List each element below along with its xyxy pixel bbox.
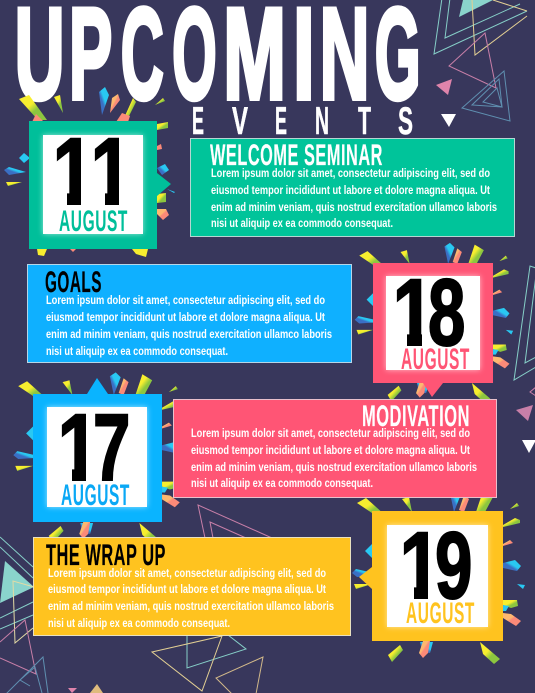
calendar: 19 august — [359, 511, 503, 641]
body text: nisi ut aliquip ex ea commodo consequat. — [46, 346, 228, 358]
body text: eiusmod tempor incididunt ut labore et dolore magna aliqua. Ut — [46, 312, 325, 324]
background triangles: bottom left — [0, 537, 103, 693]
panel: goals — [28, 264, 352, 362]
background triangles: centre — [152, 505, 272, 693]
date number: 1 — [400, 513, 442, 619]
body text — [48, 568, 334, 630]
heading: WELCOME SEMINAR — [210, 139, 383, 172]
date number — [62, 414, 128, 481]
title: events: N — [315, 100, 329, 143]
body text: Lorem ipsum dolor sit amet, consectetur adipiscing elit, sed do — [48, 568, 326, 580]
calendar: 18 august — [373, 260, 493, 397]
heading: GOALS — [45, 266, 102, 299]
heading: THE WRAP UP — [46, 539, 166, 572]
calendar: 11 august — [29, 119, 171, 249]
date number: 1 — [58, 395, 100, 501]
body text — [191, 428, 477, 490]
panel: the wrap up — [34, 538, 350, 636]
date number — [404, 530, 471, 600]
month: AUGUST — [61, 479, 130, 512]
body text: Lorem ipsum dolor sit amet, consectetur adipiscing elit, sed do — [191, 428, 470, 440]
background triangles: right middle — [514, 266, 535, 421]
burst: 19 august — [352, 489, 525, 664]
date number: 1 — [52, 119, 94, 225]
icon: white triangle top right — [441, 114, 456, 127]
burst: 18 august — [355, 243, 513, 403]
body text: enim ad minim veniam, quis nostrud exercitation ullamco laboris — [46, 329, 332, 341]
background triangles: top right — [434, 0, 527, 121]
body text — [46, 295, 332, 358]
body text: nisi ut aliquip ex ea commodo consequat. — [211, 218, 393, 230]
date number — [396, 278, 464, 347]
title: events: T — [358, 100, 371, 143]
panel: modivation — [174, 400, 496, 498]
date number: 1 — [90, 119, 132, 225]
body text: Lorem ipsum dolor sit amet, consectetur adipiscing elit, sed do — [46, 295, 325, 307]
title: events: E — [275, 100, 287, 143]
body text: enim ad minim veniam, quis nostrud exercitation ullamco laboris — [48, 601, 334, 613]
date number — [56, 138, 119, 205]
body text: eiusmod tempor incididunt ut labore et dolore magna aliqua. Ut — [48, 584, 326, 596]
month: AUGUST — [401, 343, 470, 376]
date number: 7 — [93, 395, 130, 501]
title: events — [192, 100, 413, 143]
title: events: V — [232, 100, 248, 143]
date number: 1 — [392, 260, 434, 366]
body text — [211, 168, 497, 230]
body text: nisi ut aliquip ex ea commodo consequat. — [48, 618, 230, 630]
date number: 9 — [435, 513, 472, 619]
month: AUGUST — [59, 205, 128, 238]
burst: 11 august — [4, 87, 175, 257]
title: events: E — [192, 100, 204, 143]
date number: 8 — [428, 260, 465, 366]
burst: 17 august — [13, 372, 184, 545]
body text: eiusmod tempor incididunt ut labore et dolore magna aliqua. Ut — [191, 445, 470, 457]
icon: white triangle right — [522, 440, 535, 453]
calendar: 17 august — [33, 378, 162, 522]
body text: nisi ut aliquip ex ea commodo consequat. — [191, 478, 373, 490]
panel: welcome seminar — [190, 138, 514, 236]
title: events: S — [398, 100, 413, 143]
